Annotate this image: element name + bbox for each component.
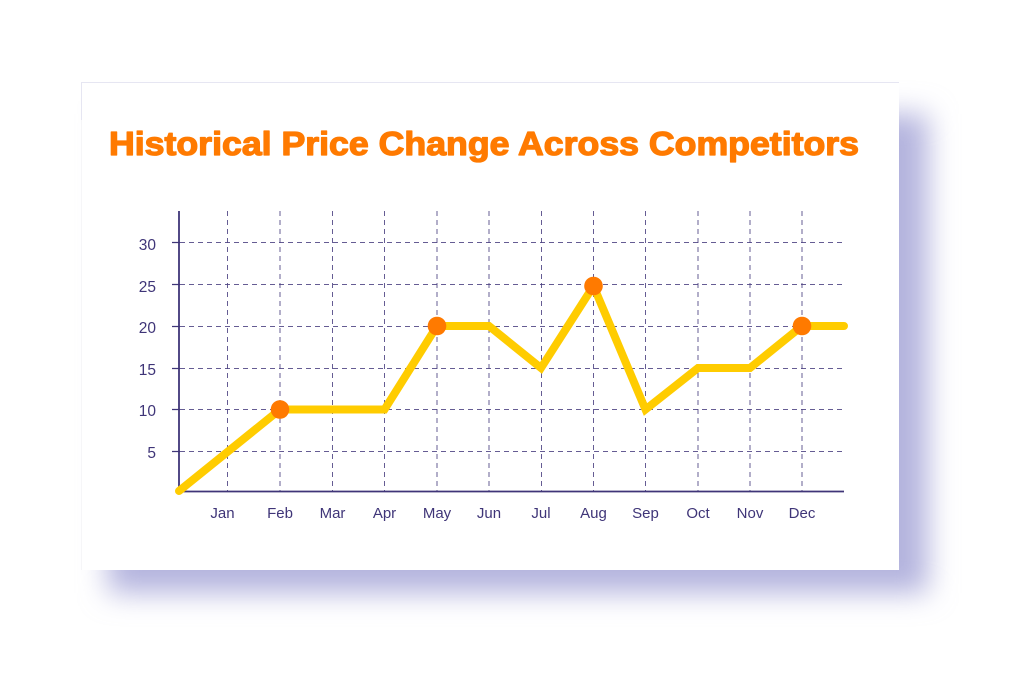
y axis labels [139, 237, 156, 462]
x axis labels: Mar [320, 505, 345, 522]
y axis labels: 30 [139, 237, 156, 254]
panel: chart card [81, 82, 899, 570]
data line [179, 286, 844, 491]
axes [172, 211, 844, 492]
grid lines [180, 211, 845, 491]
card shadow [108, 114, 928, 593]
x axis labels: Jun [477, 505, 501, 522]
x axis labels: Feb [267, 505, 293, 522]
y axis labels: 5 [147, 445, 156, 462]
title: Historical Price Change Across Competitors [109, 125, 859, 162]
data points [271, 277, 811, 419]
y axis labels: 25 [139, 279, 156, 296]
line chart [139, 211, 845, 522]
x axis labels: Dec [789, 505, 816, 522]
x axis labels: May [423, 505, 452, 522]
x axis labels: Sep [632, 505, 659, 522]
x axis labels: Oct [686, 505, 710, 522]
y axis labels: 20 [139, 320, 156, 337]
x axis labels: Jul [531, 505, 551, 522]
x axis labels: Nov [737, 505, 764, 522]
x axis labels: Apr [373, 505, 396, 522]
x axis labels [210, 505, 816, 522]
y axis labels: 15 [139, 362, 156, 379]
x axis labels: Aug [580, 505, 607, 522]
y axis labels: 10 [139, 403, 156, 420]
x axis labels: Jan [210, 505, 235, 522]
